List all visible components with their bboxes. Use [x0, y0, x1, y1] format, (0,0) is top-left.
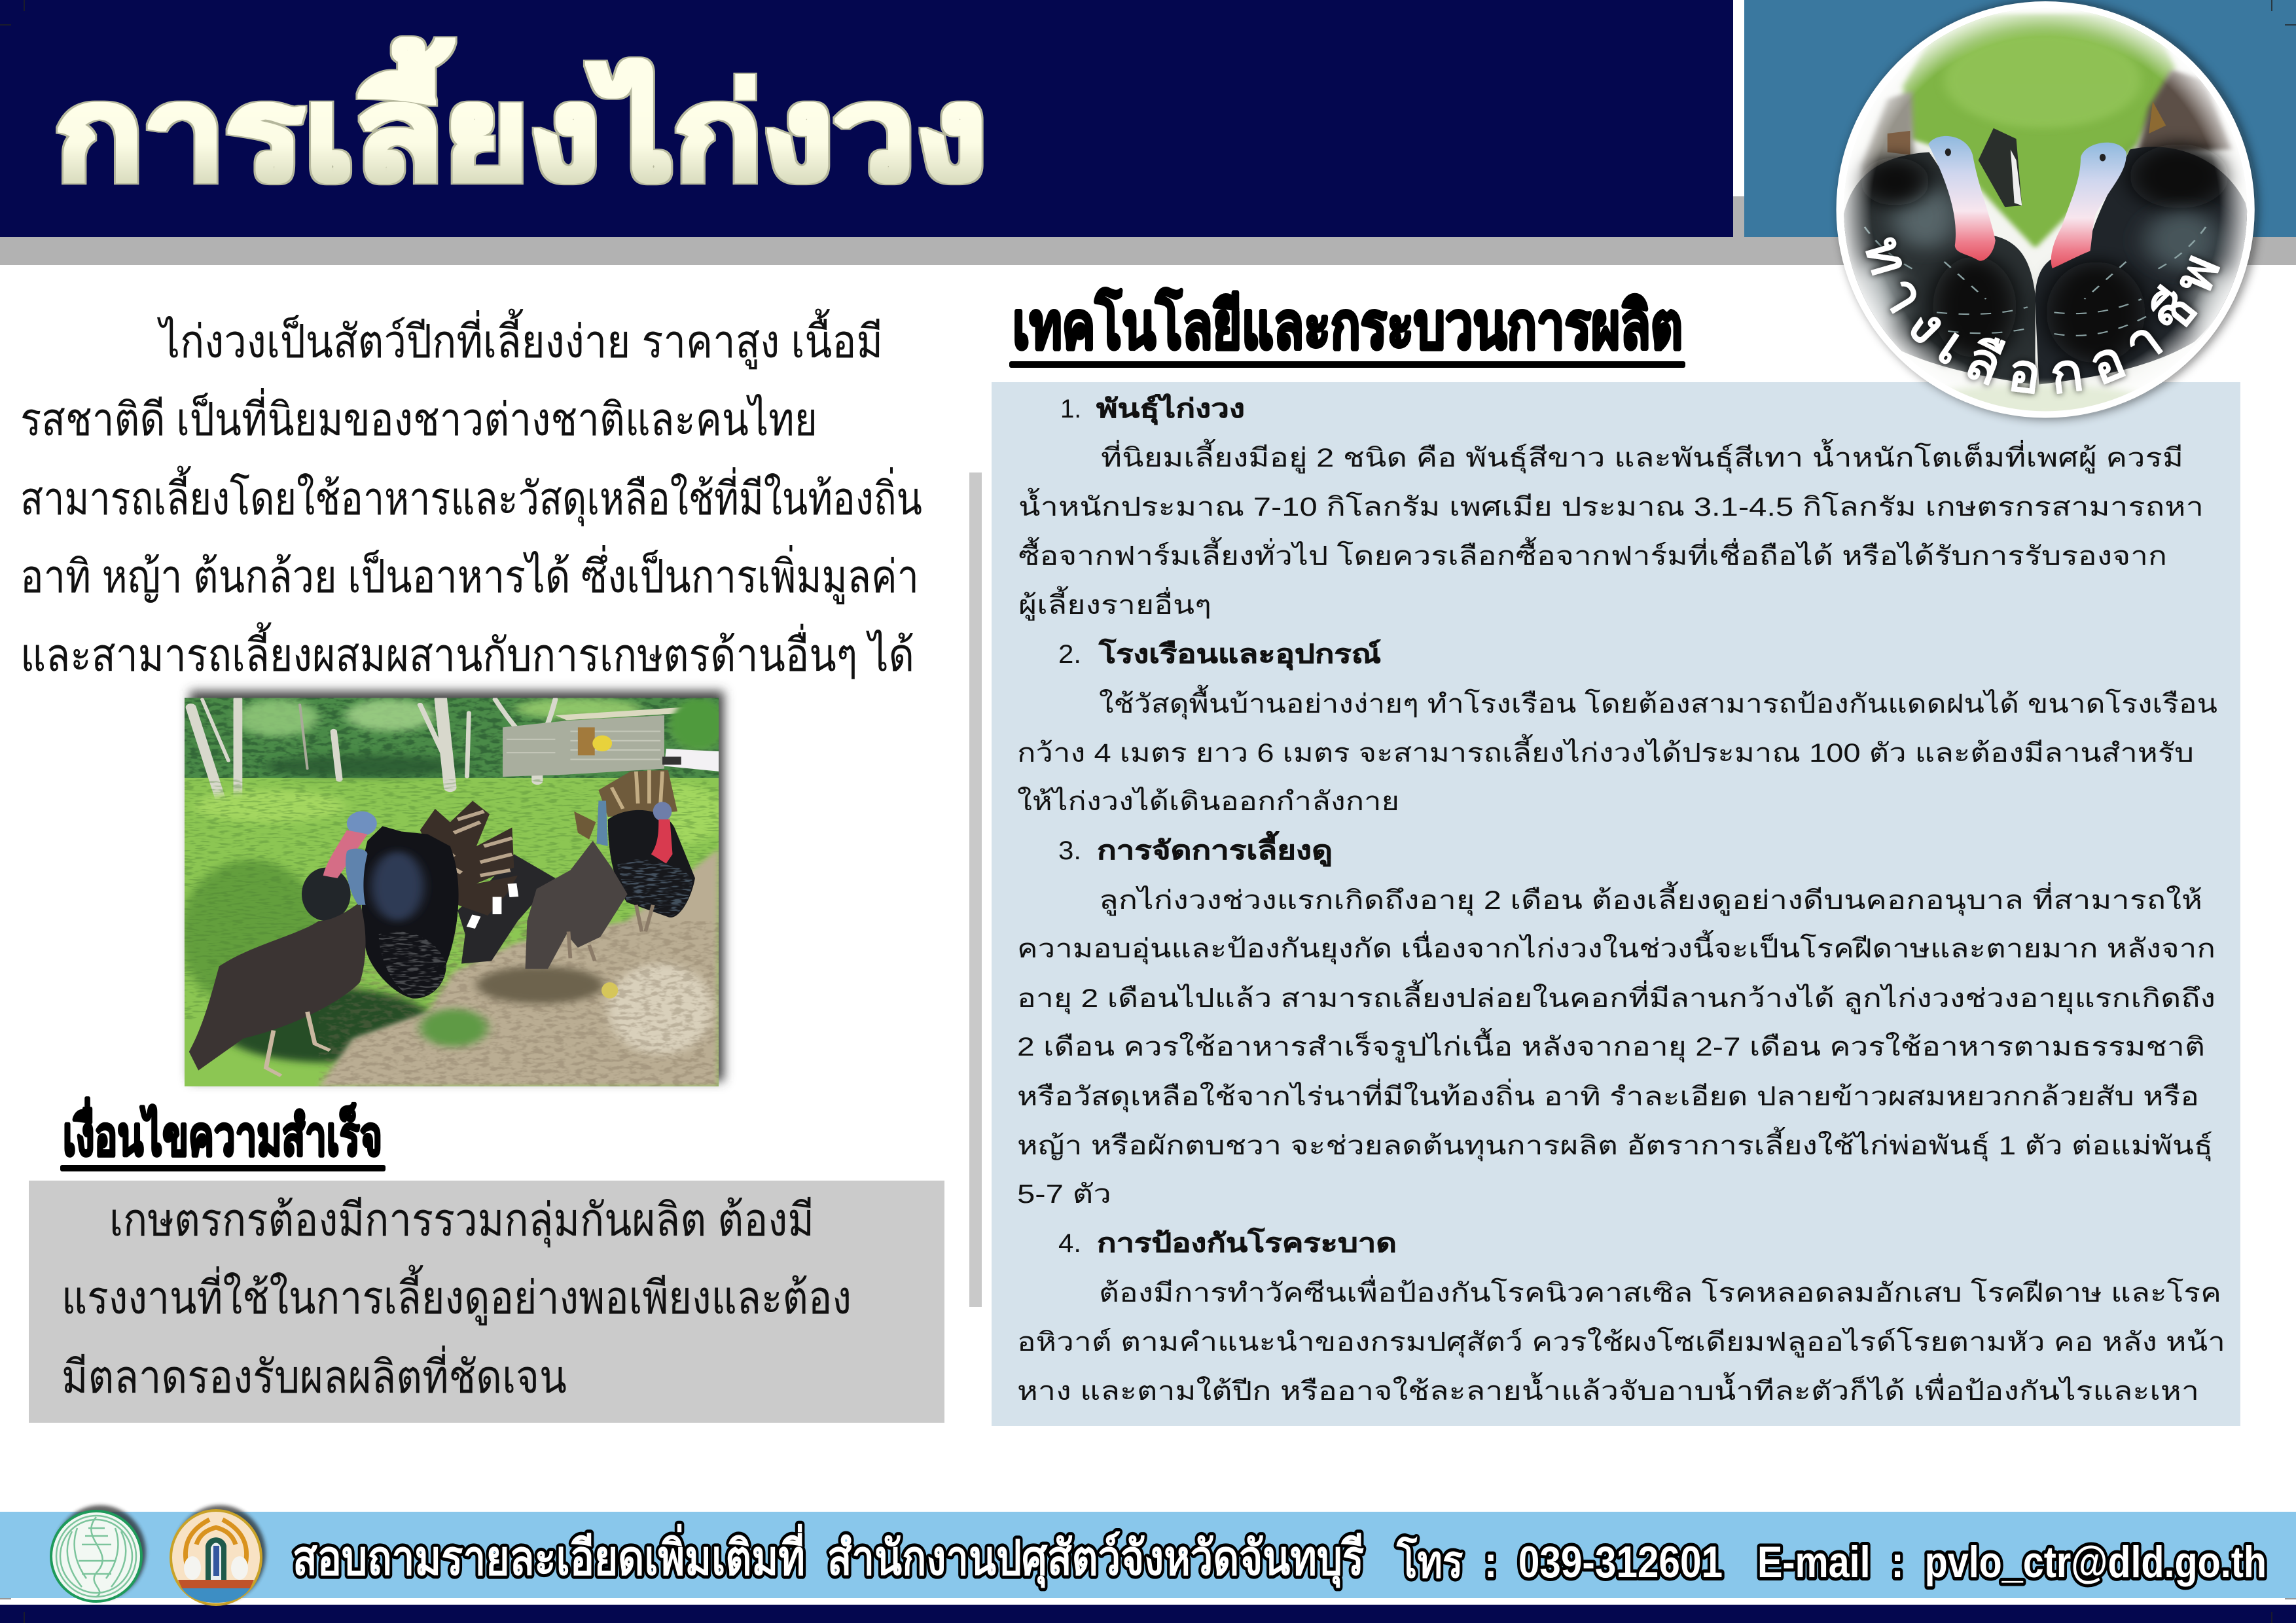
- section 2: housing: กว้าง 4 เมตร ยาว 6 เมตร จะสามารถเลี้ยงไก่งวงได้ประมาณ 100 ตัว และต้องมีลานสำหรับ: [1017, 734, 2194, 768]
- section 1: breeds: น้ำหนักประมาณ 7-10 กิโลกรัม เพศเมีย ประมาณ 3.1-4.5 กิโลกรัม เกษตรกรสามารถหา: [1018, 488, 2204, 522]
- panel: success conditions: [29, 1181, 944, 1423]
- section 4: disease prevention: 4.: [1058, 1229, 1081, 1258]
- section 4: disease prevention: [1017, 1228, 2225, 1406]
- intro text block: ไก่งวงเป็นสัตว์ปีกที่เลี้ยงง่าย ราคาสูง เนื้อมี: [157, 308, 883, 370]
- section 3: husbandry: 3.: [1058, 836, 1081, 865]
- panel: success conditions: มีตลาดรองรับผลผลิตที่ชัดเจน: [62, 1346, 567, 1402]
- intro text block: และสามารถเลี้ยงผสมผสานกับการเกษตรด้านอื่นๆ ได้: [20, 622, 914, 681]
- subheading: conditions for success: [60, 1097, 386, 1171]
- panel: success conditions: เกษตรกรต้องมีการรวมกลุ่มกันผลิต ต้องมี: [109, 1194, 814, 1248]
- header band: [0, 0, 2296, 265]
- section 4: disease prevention: หาง และตามใต้ปีก หรืออาจใช้ละลายน้ำแล้วจับอาบน้ำทีละตัวก็ได้ เพื่อป้องกันไรและเหา: [1017, 1372, 2199, 1406]
- vignette: [1833, 0, 2257, 421]
- necks and heads: [1928, 136, 1996, 261]
- tail feathers: [1861, 91, 1914, 192]
- footer contact text: สอบถามรายละเอียดเพิ่มเติมที่: [293, 1524, 805, 1585]
- grass shade: [179, 859, 323, 1009]
- column divider: [969, 473, 982, 1307]
- section 3: husbandry: หรือวัสดุเหลือใช้จากไร่นาที่มีในท้องถิ่น อาทิ รำละเอียด ปลายข้าวผสมหยวกกล้วยสับ หรือ: [1017, 1079, 2199, 1113]
- title: การเลี้ยงไก่งวง: [55, 38, 987, 207]
- section 2: housing: โรงเรือนและอุปกรณ์: [1098, 639, 1381, 671]
- section 3: husbandry: 5-7 ตัว: [1017, 1180, 1111, 1209]
- subheading: technology and production: เทคโนโลยีและกระบวนการผลิต: [1013, 287, 1683, 363]
- section 1: breeds: พันธุ์ไก่งวง: [1096, 393, 1245, 425]
- section 2: housing: ให้ไก่งวงได้เดินออกกำลังกาย: [1017, 786, 1399, 816]
- subheading: conditions for success: เงื่อนไขความสำเร็จ: [63, 1097, 382, 1167]
- bird shadow: [217, 988, 435, 1062]
- intro text block: [20, 308, 922, 681]
- bodies: [1844, 152, 2036, 385]
- section 1: breeds: ซื้อจากฟาร์มเลี้ยงทั่วไป โดยควรเลือกซื้อจากฟาร์มที่เชื่อถือได้ หรือได้รับการรับรองจาก: [1018, 537, 2167, 571]
- intro text block: รสชาติดี เป็นที่นิยมของชาวต่างชาติและคนไทย: [20, 388, 817, 445]
- footer contact band: [0, 1505, 2296, 1623]
- section 3: husbandry: [1017, 831, 2215, 1209]
- feather flecks: [1865, 227, 2206, 336]
- badge caption: career path: ทางเลือกอาชีพ: [1862, 235, 2224, 399]
- badge: turkey medallion: [1833, 0, 2264, 425]
- footer contact text: สำนักงานปศุสัตว์จังหวัดจันทบุรี: [827, 1531, 1364, 1588]
- section 2: housing: 2.: [1058, 640, 1081, 669]
- intro text block: อาทิ หญ้า ต้นกล้วย เป็นอาหารได้ ซึ่งเป็นการเพิ่มมูลค่า: [20, 545, 919, 605]
- hen body: [189, 902, 366, 1071]
- section 3: husbandry: การจัดการเลี้ยงดู: [1097, 831, 1333, 866]
- front hen wing: [302, 868, 351, 921]
- intro text block: สามารถเลี้ยงโดยใช้อาหารและวัสดุเหลือใช้ที่มีในท้องถิ่น: [20, 465, 922, 527]
- section 1: breeds: [1018, 393, 2204, 620]
- section 4: disease prevention: อหิวาต์ ตามคำแนะนำของกรมปศุสัตว์ ควรใช้ผงโซเดียมฟลูออไรด์โรยตามหัว คอ หลัง หน้า: [1017, 1327, 2225, 1358]
- section 3: husbandry: ความอบอุ่นและป้องกันยุงกัด เนื่องจากไก่งวงในช่วงนี้จะเป็นโรคฝีดาษและตายมาก หลังจาก: [1017, 929, 2215, 965]
- tom head and wattle: [347, 812, 377, 836]
- section 2: housing: [1017, 639, 2217, 816]
- section 3: husbandry: ลูกไก่งวงช่วงแรกเกิดถึงอายุ 2 เดือน ต้องเลี้ยงดูอย่างดีบนคอกอนุบาล ที่สามารถให้: [1099, 881, 2202, 916]
- panel: production details: [992, 382, 2240, 1426]
- section 2: housing: ใช้วัสดุพื้นบ้านอย่างง่ายๆ ทำโรงเรือน โดยต้องสามารถป้องกันแดดฝนได้ ขนาดโรงเรือน: [1099, 685, 2217, 720]
- section 4: disease prevention: การป้องกันโรคระบาด: [1097, 1228, 1397, 1258]
- section 4: disease prevention: ต้องมีการทำวัคซีนเพื่อป้องกันโรคนิวคาสเซิล โรคหลอดลมอักเสบ โรคฝีดาษ และโรค: [1099, 1275, 2221, 1308]
- section 1: breeds: ผู้เลี้ยงรายอื่นๆ: [1018, 586, 1211, 620]
- footer contact text: [293, 1524, 2267, 1588]
- logo: chanthaburi provincial seal: [171, 1505, 266, 1605]
- section 3: husbandry: หญ้า หรือผักตบชวา จะช่วยลดต้นทุนการผลิต อัตราการเลี้ยงใช้ไก่พ่อพันธุ์ 1 ตัว ต่อแม่พันธุ์: [1017, 1126, 2213, 1162]
- big tom tail: [420, 801, 518, 916]
- footer contact text: โทร : 039-312601: [1396, 1536, 1723, 1587]
- big tom body: [361, 826, 459, 999]
- section 3: husbandry: อายุ 2 เดือนไปแล้ว สามารถเลี้ยงปล่อยในคอกที่มีลานกว้างได้ ลูกไก่งวงช่วงอายุแรกเกิดถึง: [1017, 979, 2215, 1014]
- tree zone: [185, 698, 719, 778]
- bare ground: [319, 849, 719, 1086]
- panel: success conditions: แรงงานที่ใช้ในการเลี้ยงดูอย่างพอเพียงและต้อง: [62, 1264, 852, 1326]
- house: [503, 715, 664, 777]
- right tom: [598, 770, 677, 817]
- section 3: husbandry: 2 เดือน ควรใช้อาหารสำเร็จรูปไก่เนื้อ หลังจากอายุ 2-7 เดือน ควรใช้อาหารตามธรรมชาติ: [1017, 1027, 2205, 1063]
- photo: turkeys on farm: [179, 691, 728, 1086]
- middle hens: [457, 854, 555, 963]
- section 1: breeds: ที่นิยมเลี้ยงมีอยู่ 2 ชนิด คือ พันธุ์สีขาว และพันธุ์สีเทา น้ำหนักโตเต็มที่เพศผู้ ควรมี: [1101, 438, 2183, 474]
- section 1: breeds: 1.: [1060, 395, 1081, 423]
- logo: department of livestock seal: [51, 1505, 146, 1601]
